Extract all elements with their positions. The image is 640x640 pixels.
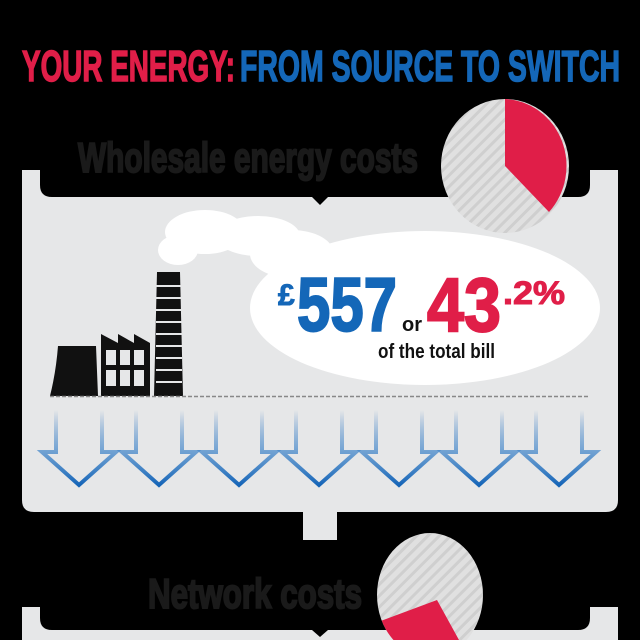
stat: 557 — [278, 263, 565, 363]
arrows — [42, 410, 596, 485]
panel: wholesale — [22, 170, 618, 540]
stat: 557: or — [402, 314, 422, 336]
heading: network: Network costs — [148, 570, 362, 617]
cloud — [158, 210, 600, 385]
pie: network — [377, 533, 483, 640]
heading: wholesale: Wholesale energy costs — [78, 134, 418, 181]
pie: wholesale — [441, 99, 569, 233]
stat: 557: .2% — [503, 275, 565, 311]
stat: 557: 43 — [427, 263, 501, 348]
stat: 557: £ — [278, 279, 295, 312]
icon: power station — [50, 272, 183, 396]
panel: network — [22, 607, 618, 640]
title — [22, 42, 620, 91]
title: YOUR ENERGY: — [22, 42, 235, 91]
stat: 557: 557 — [297, 263, 397, 348]
stat: 557: of the total bill — [378, 341, 495, 363]
